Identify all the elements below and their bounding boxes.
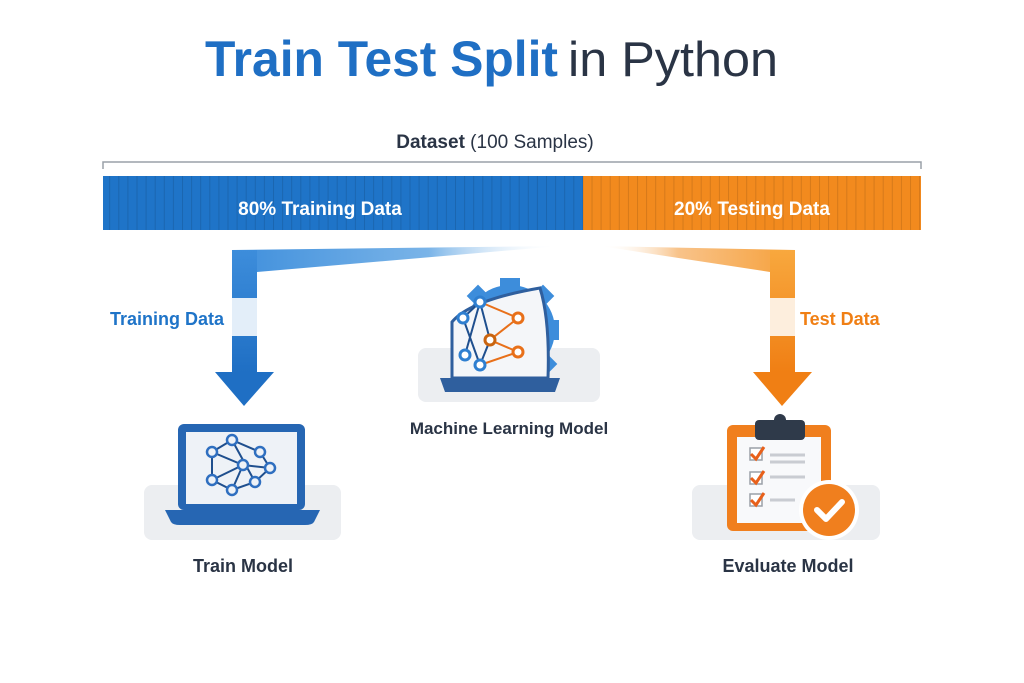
title: Train Test Split <box>205 31 558 87</box>
label: train model: Train Model <box>193 556 293 576</box>
arrow: test data: Test Data <box>800 309 881 329</box>
label: machine learning model: Machine Learning Model <box>410 419 608 438</box>
bar: dataset split <box>103 176 921 230</box>
icon: train model laptop <box>144 424 341 540</box>
bar: dataset split: 80% Training Data <box>238 199 402 220</box>
arrow: training data: Training Data <box>110 309 225 329</box>
bar: dataset split: 20% Testing Data <box>674 199 830 220</box>
arrow: test data <box>600 246 881 406</box>
icon: machine learning model <box>418 278 600 402</box>
title <box>205 31 778 87</box>
arrow: training data <box>110 246 560 406</box>
dataset label: Dataset (100 Samples) <box>396 132 594 153</box>
icon: evaluate model clipboard <box>692 414 880 540</box>
title: in Python <box>568 33 778 87</box>
label: evaluate model: Evaluate Model <box>722 556 854 576</box>
